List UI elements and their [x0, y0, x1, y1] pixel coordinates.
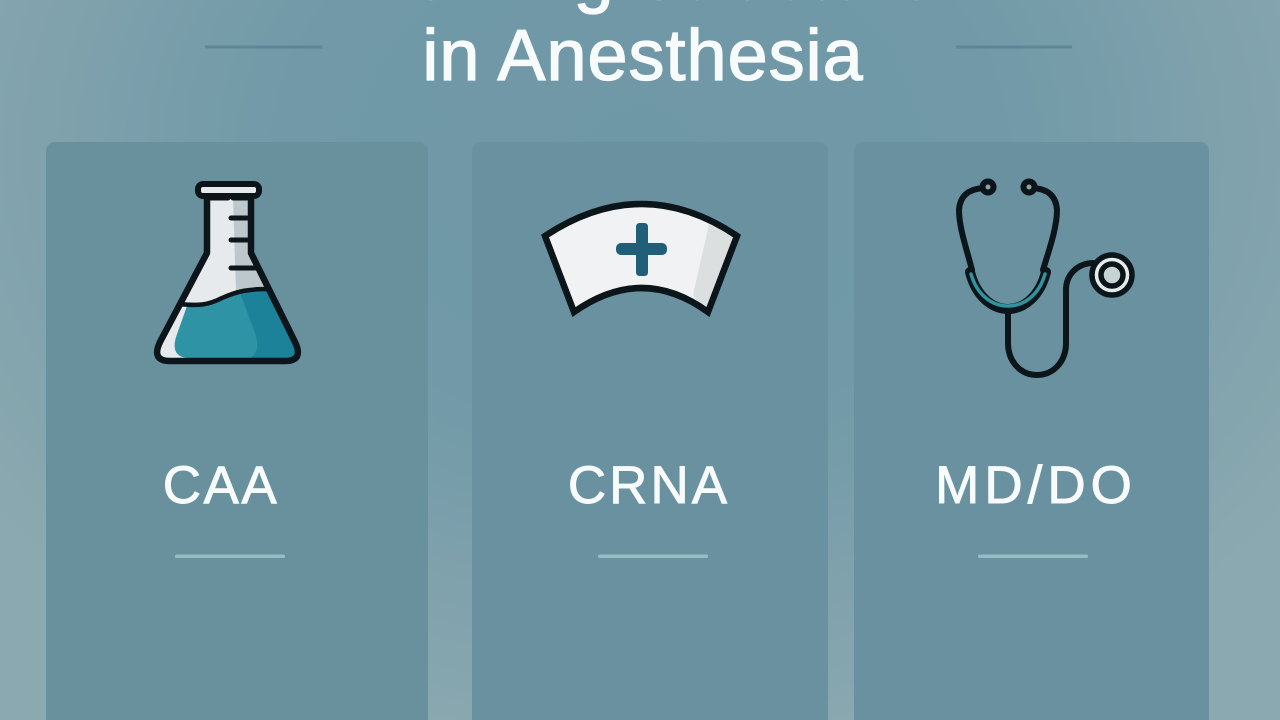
divider: CRNA: [598, 554, 708, 558]
icon: nurse cap: [545, 204, 737, 312]
divider: CAA: [175, 554, 285, 558]
label: MD/DO: MD/DO: [935, 456, 1137, 515]
title: in Anesthesia: [422, 16, 864, 96]
panel: MD/DO: [854, 142, 1209, 720]
icon: flask: [157, 184, 298, 361]
panel: CRNA: [472, 142, 828, 720]
icon: stethoscope: [959, 182, 1132, 375]
panel: CAA: [46, 142, 428, 720]
icon detail: cross: [616, 223, 667, 276]
divider: MD/DO: [978, 554, 1088, 558]
label: CAA: CAA: [163, 456, 279, 515]
title accent line left: [205, 46, 322, 48]
title accent line right: [956, 46, 1072, 48]
title: [349, 0, 937, 96]
label: CRNA: CRNA: [568, 456, 730, 515]
